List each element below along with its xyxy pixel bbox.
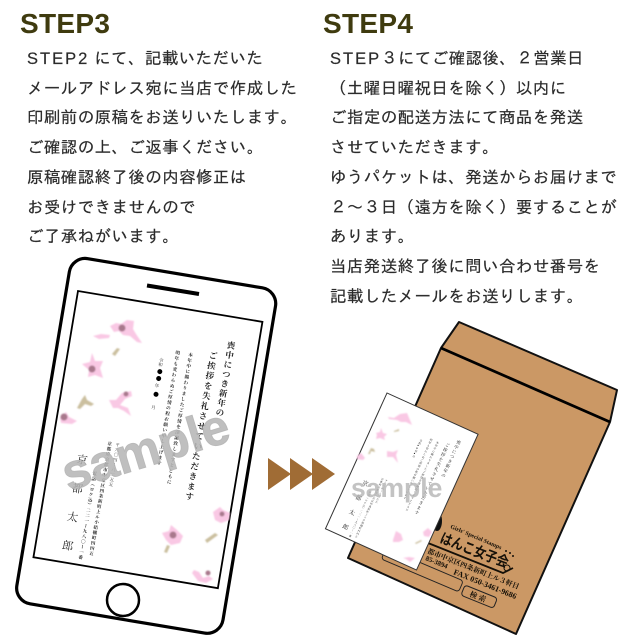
envelope shop stamp: Girls' Special Stamps	[449, 524, 503, 552]
printed card on envelope: 〒六〇四ー八二五五	[374, 479, 388, 504]
printed card on envelope: 喪中につき新年の	[440, 438, 463, 479]
text block: step 4 description: あります。	[330, 228, 414, 246]
printed card on envelope: 都	[353, 492, 363, 503]
mourning card on phone screen: 都	[70, 480, 84, 495]
text block: step 4 description: STEP３にてご確認後、２営業日	[330, 50, 584, 68]
mourning card on phone screen: 月	[151, 404, 157, 411]
printed card on envelope: 京	[359, 478, 369, 488]
text block: step 4 description: ご指定の配送方法にて商品を発送	[330, 109, 584, 127]
mourning card on phone screen: ご挨拶を失礼させていただきます	[184, 350, 219, 503]
mourning card on phone screen: 京都府京都市中京区四条新町上ル小結棚町四四五	[88, 440, 113, 557]
mourning card on phone screen: 〒六〇四ー八二五五	[108, 442, 121, 488]
mourning card on phone screen: 明年も変わらぬご厚情の程お願い申し上げます	[156, 349, 181, 467]
envelope shop stamp: 85-3894	[424, 554, 449, 571]
printed card on envelope: ご挨拶を失礼させていただきます	[413, 441, 452, 517]
printed card on envelope: 本年中に賜わりましたご厚情を深謝致しますとともに	[404, 440, 440, 512]
watermark: sample on phone: sample	[55, 398, 236, 502]
mourning card on phone screen: 太	[65, 509, 79, 523]
watermark: sample on printed card: sample	[351, 473, 442, 503]
text block: step 4 description: ２～３日（遠方を除く）要することが	[330, 199, 617, 217]
icon: kraft envelope	[348, 322, 617, 634]
printed card on envelope: 太	[346, 507, 356, 517]
text block: step 3 description: ご了承ねがいます。	[27, 228, 179, 246]
printed card on envelope: 京都府京都市中京区四条新町上ル小結棚町四四五	[354, 476, 385, 539]
text block: step 3 description: ご確認の上、ご返事ください。	[27, 139, 264, 157]
printed card on envelope: 郎	[340, 522, 349, 532]
envelope shop stamp: 検索	[468, 589, 490, 605]
text block: step 3 description: STEP2 にて、記載いただいた	[27, 50, 263, 68]
mourning card on phone screen: 郎	[60, 537, 74, 552]
text block: step 3 description: メールアドレス宛に当店で作成した	[27, 80, 297, 98]
text block: step 4 description: （土曜日曜祝日を除く）以内に	[330, 80, 567, 98]
printed card on envelope: 明年も変わらぬご厚情の程お願い申し上げます	[402, 437, 433, 501]
arrows: three right-pointing triangles	[268, 458, 335, 490]
envelope shop stamp: 都市中京区四条新町上ル３軒目	[426, 546, 521, 591]
icon: smartphone with card preview	[14, 256, 278, 636]
heading: STEP4: STEP4	[323, 8, 413, 39]
mourning card on phone screen: 喪中につき新年の	[214, 340, 237, 418]
text block: step 4 description: させていただきます。	[330, 139, 499, 157]
text block: step 4 description: ゆうパケットは、発送からお届けまで	[330, 169, 617, 187]
text block: step 3 description: お受けできませんので	[27, 199, 196, 217]
mourning card on phone screen: 本年中に賜わりましたご厚情を深謝致しますとともに	[166, 351, 194, 486]
printed card on envelope: 令和●●年●月	[411, 438, 423, 459]
text block: step 3 description: 原稿確認終了後の内容修正は	[27, 169, 247, 187]
envelope shop stamp	[424, 524, 521, 605]
text block: step 4 description: 当店発送終了後に問い合わせ番号を	[330, 258, 600, 276]
printed card on envelope: 電話（ロケ込）二二一ー九八〇ー一番	[348, 489, 372, 538]
mourning card on phone screen	[33, 291, 262, 588]
envelope shop stamp: FAX 050-3461-9686	[452, 568, 518, 601]
mourning card on phone screen: 京	[74, 453, 89, 466]
heading: STEP3: STEP3	[20, 8, 110, 39]
mourning card on phone screen: 電話（ロケ込）二二一ー九八〇ー一番	[77, 470, 98, 561]
text block: step 3 description	[27, 50, 297, 246]
text block: step 4 description	[330, 50, 617, 306]
printed card on envelope	[325, 393, 478, 570]
mourning card on phone screen: 令和	[157, 356, 165, 369]
envelope shop stamp: はんこ女子会	[438, 529, 511, 571]
text block: step 3 description: 印刷前の原稿をお送りいたします。	[27, 109, 297, 127]
mourning card on phone screen: 年	[154, 382, 160, 390]
text block: step 4 description: 記載したメールをお送りします。	[330, 288, 584, 306]
